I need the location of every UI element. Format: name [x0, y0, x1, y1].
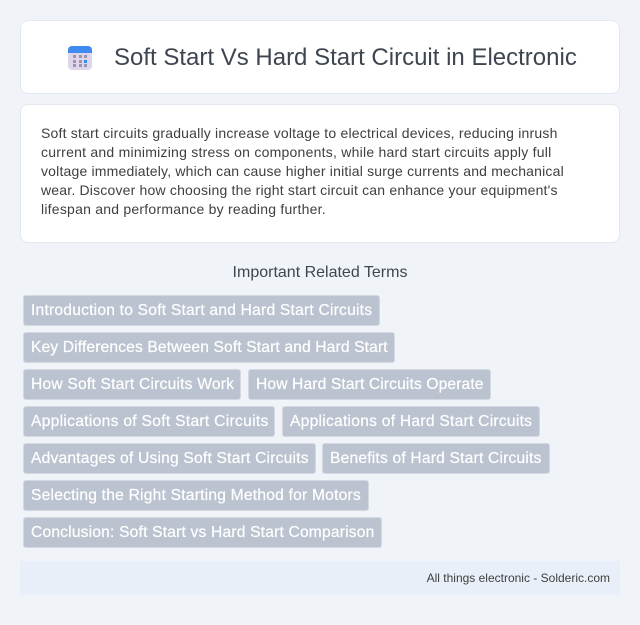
tag: Selecting the Right Starting Method for Motors	[31, 487, 361, 504]
tag: Conclusion: Soft Start vs Hard Start Comparison	[31, 524, 374, 541]
tag: Applications of Soft Start Circuits	[31, 413, 269, 430]
intro paragraph: lifespan and performance by reading further.	[41, 201, 326, 217]
tag	[23, 443, 316, 474]
tag	[23, 295, 380, 326]
tag	[23, 406, 275, 437]
tag: How Hard Start Circuits Operate	[256, 376, 484, 393]
intro paragraph	[41, 125, 564, 217]
title: Soft Start Vs Hard Start Circuit in Electronic	[114, 44, 577, 71]
intro paragraph: current and minimizing stress on components, while hard start circuits apply full	[41, 144, 551, 160]
tag	[322, 443, 550, 474]
related terms tags	[23, 295, 550, 548]
tag	[23, 332, 395, 363]
tag: How Soft Start Circuits Work	[31, 376, 234, 393]
footer bar	[20, 561, 620, 595]
tag: Advantages of Using Soft Start Circuits	[31, 450, 309, 467]
tag: Benefits of Hard Start Circuits	[330, 450, 542, 467]
tag: Applications of Hard Start Circuits	[290, 413, 532, 430]
tag	[23, 480, 369, 511]
footer credit: All things electronic - Solderic.com	[427, 571, 610, 585]
tag: Introduction to Soft Start and Hard Start Circuits	[31, 302, 372, 319]
tag	[23, 517, 382, 548]
intro paragraph: wear. Discover how choosing the right start circuit can enhance your equipment's	[41, 182, 558, 198]
icon: calendar	[68, 46, 92, 70]
intro paragraph: voltage immediately, which can cause higher initial surge currents and mechanical	[41, 163, 564, 179]
tag	[248, 369, 491, 400]
intro text panel	[20, 104, 620, 243]
tag	[23, 369, 241, 400]
header panel	[20, 20, 620, 94]
tag	[282, 406, 540, 437]
tag: Key Differences Between Soft Start and Hard Start	[31, 339, 388, 356]
intro paragraph: Soft start circuits gradually increase voltage to electrical devices, reducing inrush	[41, 125, 558, 141]
section heading: Important Related Terms	[233, 264, 407, 281]
